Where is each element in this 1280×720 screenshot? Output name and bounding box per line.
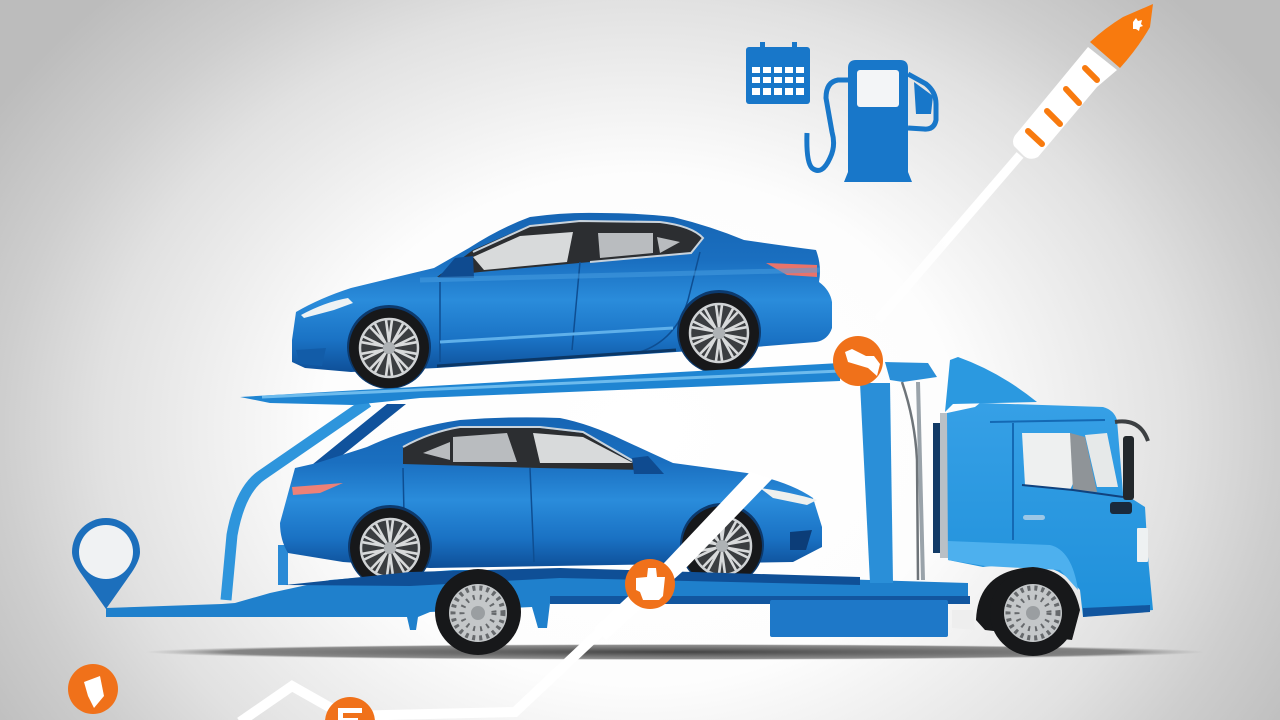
truck cab (933, 357, 1153, 656)
upper deck arms (226, 402, 406, 600)
marker: bottom centre (325, 697, 375, 720)
marker: bottom left (68, 664, 118, 714)
marker: upper deck (833, 336, 883, 386)
wheel: top car front (347, 305, 431, 389)
wheel: lower car rear (348, 505, 432, 589)
marker: lower car (625, 559, 675, 609)
wheel: trailer (435, 569, 521, 655)
car: lower sedan (280, 417, 822, 589)
upper deck ramp (240, 363, 840, 405)
car: top sedan (292, 213, 832, 389)
wheel: top car rear (677, 290, 761, 374)
icon: location pin (72, 518, 140, 609)
wheel: cab (976, 567, 1080, 656)
trend line: lower segment (240, 472, 772, 720)
icon: calendar (746, 42, 810, 104)
ground shadow (145, 644, 1205, 660)
icon: fuel pump (807, 60, 936, 182)
wheel: lower car front (680, 503, 764, 587)
truck chassis (106, 362, 970, 655)
trend line: upper segment (878, 155, 1020, 320)
icon: rocket (1013, 4, 1153, 159)
